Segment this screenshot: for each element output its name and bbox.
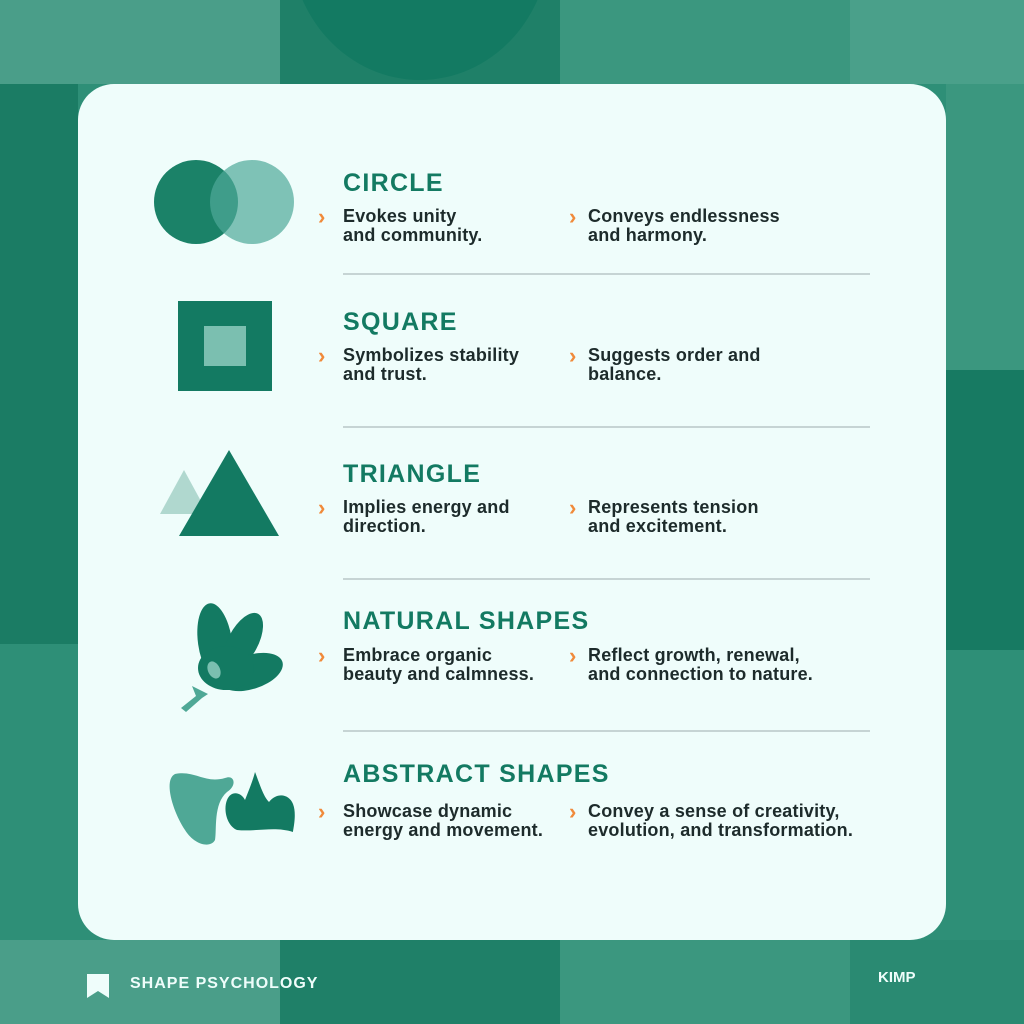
text: abstract points: Convey a sense of creativity, [588, 801, 840, 821]
text: triangle points [318, 495, 759, 536]
text: circle points [318, 204, 780, 245]
text: circle points: Conveys endlessness [588, 206, 780, 226]
text: natural points: › [569, 643, 576, 668]
heading: natural shapes: NATURAL SHAPES [343, 607, 589, 635]
heading: square: SQUARE [343, 308, 458, 336]
text: natural points: › [318, 643, 325, 668]
text: triangle points: › [318, 495, 325, 520]
text: abstract points [318, 799, 853, 840]
icon: flower [181, 603, 283, 712]
text: square points: Symbolizes stability [343, 345, 519, 365]
text: natural points: Embrace organic [343, 645, 492, 665]
icon: bookmark [87, 974, 109, 998]
icon: triangles [160, 450, 279, 536]
text: square points: › [318, 343, 325, 368]
text: square points: balance. [588, 364, 662, 384]
text: natural points [318, 643, 813, 684]
text: triangle points: and excitement. [588, 516, 727, 536]
text: triangle points: Represents tension [588, 497, 759, 517]
text: square points: and trust. [343, 364, 427, 384]
panel: card [78, 84, 946, 940]
text: abstract points: energy and movement. [343, 820, 543, 840]
text: square points: › [569, 343, 576, 368]
text: circle points: Evokes unity [343, 206, 456, 226]
icon: square [178, 301, 272, 391]
text: triangle points: › [569, 495, 576, 520]
text: triangle points: Implies energy and [343, 497, 510, 517]
text: triangle points: direction. [343, 516, 426, 536]
text: square points: Suggests order and [588, 345, 761, 365]
text: square points [318, 343, 761, 384]
icon: circles [154, 160, 294, 244]
heading: circle: CIRCLE [343, 169, 444, 197]
text: abstract points: › [569, 799, 576, 824]
text: circle points: and community. [343, 225, 482, 245]
text: natural points: beauty and calmness. [343, 664, 534, 684]
heading: abstract shapes: ABSTRACT SHAPES [343, 760, 610, 788]
icon: abstract blobs [170, 772, 295, 845]
text: circle points: › [318, 204, 325, 229]
text: abstract points: Showcase dynamic [343, 801, 512, 821]
footer title: SHAPE PSYCHOLOGY [130, 975, 318, 992]
text: abstract points: evolution, and transformation. [588, 820, 853, 840]
text: natural points: Reflect growth, renewal, [588, 645, 800, 665]
text: abstract points: › [318, 799, 325, 824]
text: circle points: › [569, 204, 576, 229]
logo: KIMP: KIMP [878, 969, 916, 986]
text: natural points: and connection to nature. [588, 664, 813, 684]
text: circle points: and harmony. [588, 225, 707, 245]
heading: triangle: TRIANGLE [343, 460, 481, 488]
